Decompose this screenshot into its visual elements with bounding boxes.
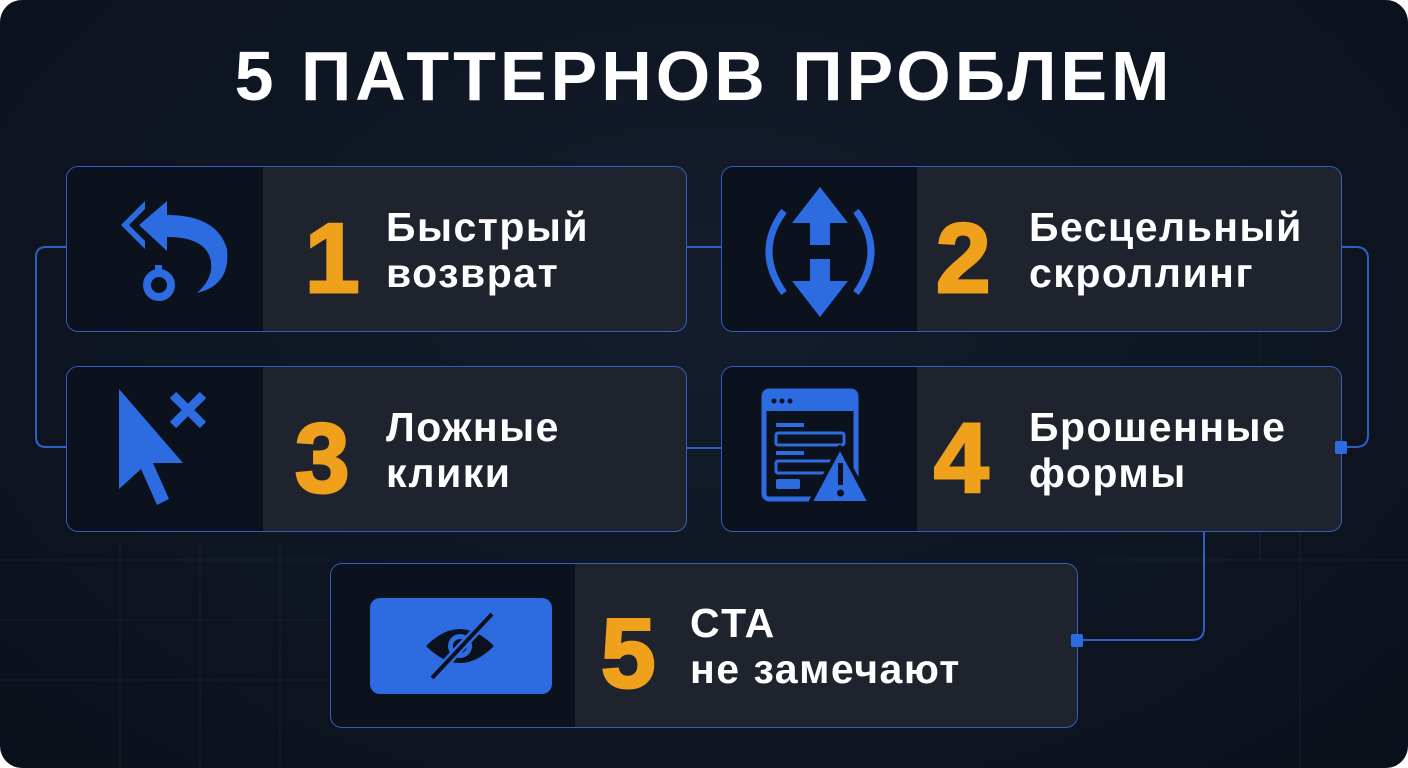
panel: card 5 — [330, 563, 1078, 728]
icon: hidden eye button — [370, 598, 552, 694]
panel: card 4 — [721, 366, 1342, 532]
panel: card 3: Ложные — [386, 404, 560, 450]
panel: card 1: 1 — [305, 203, 360, 313]
panel: card 2: скроллинг — [1029, 250, 1254, 296]
panel: card 1: возврат — [386, 250, 559, 296]
panel: card 4: формы — [1029, 450, 1187, 496]
panel: card 4: 4 — [934, 403, 989, 513]
panel: card 1 — [66, 166, 687, 332]
icon: cursor with x — [119, 389, 206, 505]
icon: form with warning — [762, 388, 867, 502]
panel: card 4: Брошенные — [1029, 404, 1286, 450]
panel: card 1: Быстрый — [386, 204, 589, 250]
panel: card 3: клики — [386, 450, 512, 496]
panel: card 2: 2 — [936, 203, 991, 313]
panel: card 5: CTA — [690, 600, 776, 646]
panel: card 2: Бесцельный — [1029, 204, 1303, 250]
panel: card 5: не замечают — [690, 646, 961, 692]
panel: card 5: 5 — [601, 598, 656, 708]
panel: card 3: 3 — [295, 403, 350, 513]
panel: card 2 — [721, 166, 1342, 332]
title: 5 ПАТТЕРНОВ ПРОБЛЕМ — [235, 37, 1173, 115]
icon: scroll arrows — [765, 187, 875, 317]
panel: card 3 — [66, 366, 687, 532]
icon: return arrow — [121, 201, 228, 301]
